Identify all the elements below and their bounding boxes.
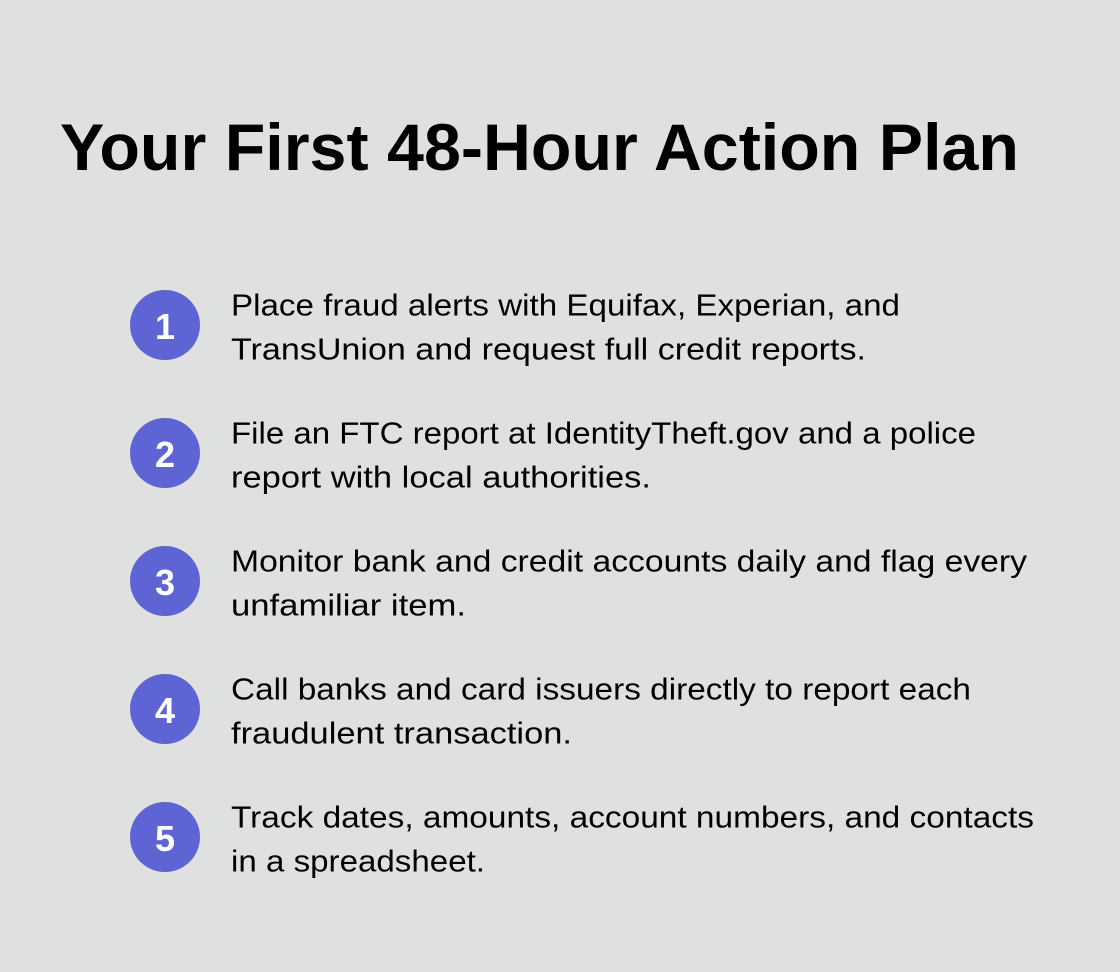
text: step 4 bbox=[231, 672, 971, 750]
title: Your First 48-Hour Action Plan bbox=[60, 110, 1019, 184]
badge: number 4: 4 bbox=[155, 690, 175, 731]
text: step 1: TransUnion and request full credit reports. bbox=[231, 332, 866, 366]
text: step 4: fraudulent transaction. bbox=[231, 716, 572, 750]
text: step 2 bbox=[231, 416, 976, 494]
text: step 2: report with local authorities. bbox=[231, 460, 651, 494]
text: step 4: Call banks and card issuers directly to report each bbox=[231, 672, 971, 706]
badge: number 3 bbox=[130, 546, 200, 616]
text: step 1 bbox=[231, 288, 900, 366]
text: step 3 bbox=[231, 544, 1028, 622]
badge: number 2: 2 bbox=[155, 434, 175, 475]
step 4 bbox=[130, 672, 971, 750]
step 5 bbox=[130, 800, 1034, 878]
text: step 3: unfamiliar item. bbox=[231, 588, 466, 622]
badge: number 1: 1 bbox=[155, 306, 175, 347]
badge: number 3: 3 bbox=[155, 562, 175, 603]
badge: number 1 bbox=[130, 290, 200, 360]
badge: number 2 bbox=[130, 418, 200, 488]
badge: number 5 bbox=[130, 802, 200, 872]
text: step 5 bbox=[231, 800, 1034, 878]
badge: number 4 bbox=[130, 674, 200, 744]
step 3 bbox=[130, 544, 1028, 622]
badge: number 5: 5 bbox=[155, 818, 175, 859]
text: step 5: in a spreadsheet. bbox=[231, 844, 485, 878]
text: step 3: Monitor bank and credit accounts daily and flag every bbox=[231, 544, 1028, 578]
step 1 bbox=[130, 288, 900, 366]
text: step 5: Track dates, amounts, account numbers, and contacts bbox=[231, 800, 1034, 834]
step 2 bbox=[130, 416, 976, 494]
text: step 2: File an FTC report at IdentityTheft.gov and a police bbox=[231, 416, 976, 450]
text: step 1: Place fraud alerts with Equifax, Experian, and bbox=[231, 288, 900, 322]
